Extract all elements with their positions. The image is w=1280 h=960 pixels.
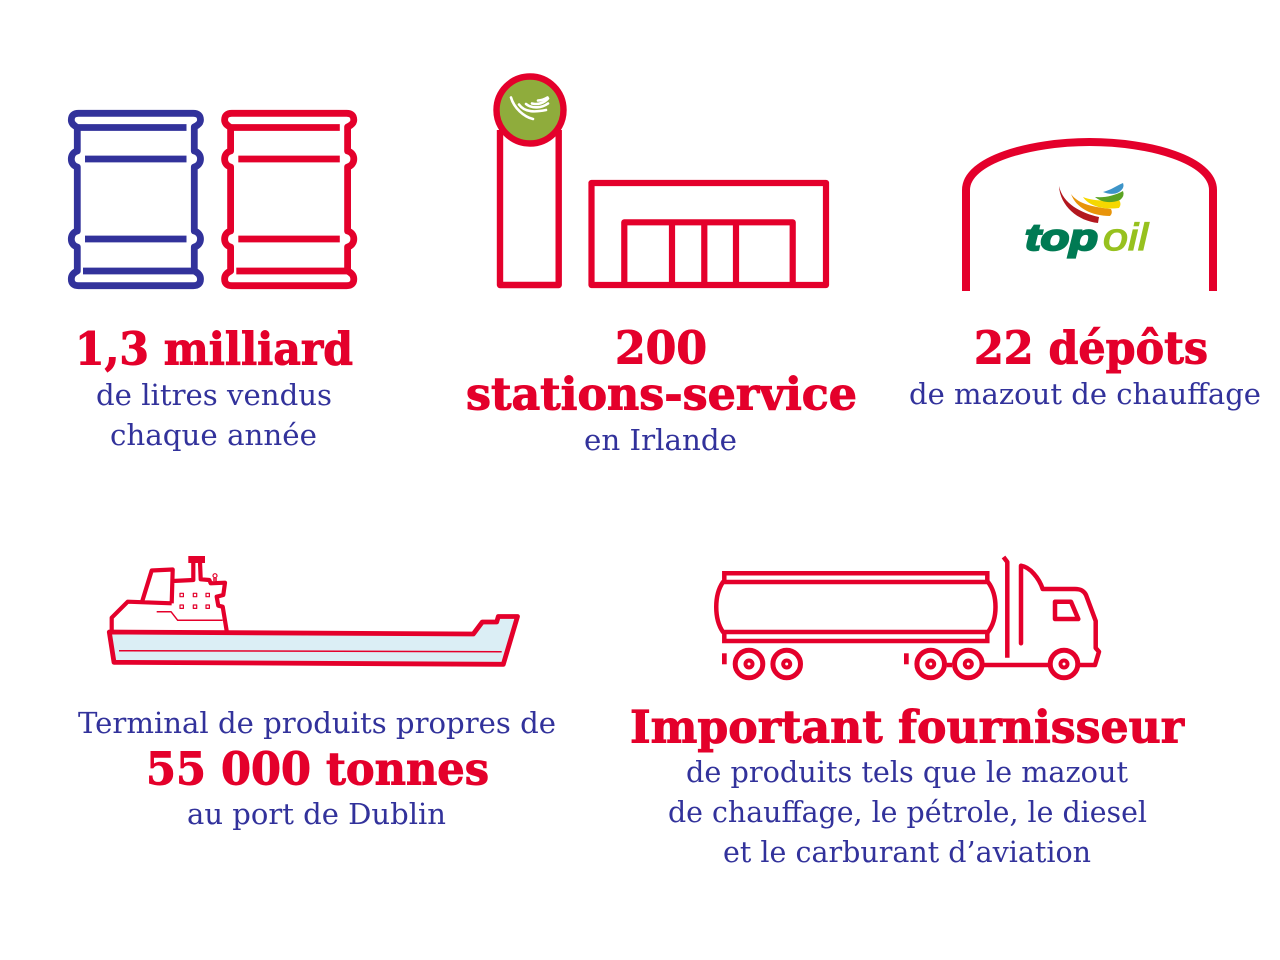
text: au port de Dublin: au port de Dublin (187, 797, 446, 831)
icon: tanker ship (109, 556, 519, 664)
text: de mazout de chauffage: de mazout de chauffage (909, 377, 1261, 411)
icon: station totem (496, 76, 564, 285)
text: de litres vendus chaque année: de litres vendus (96, 378, 332, 412)
icon: blue barrel (71, 113, 200, 286)
heading: important fournisseur: Important fournisseur (630, 700, 1185, 754)
heading: 200 stations-service (466, 322, 857, 420)
panel: service stations stat (466, 76, 857, 457)
heading: 1,3 milliard: 1,3 milliard (75, 322, 353, 376)
text: terminal de produits propres de: Terminal de produits propres de (78, 706, 556, 740)
panel: barrels stat (71, 113, 354, 452)
text: de litres vendus chaque année (96, 378, 332, 452)
logo: top oil: oil (1103, 217, 1150, 259)
logo: top oil: top (1025, 217, 1098, 258)
text: en Irlande: en Irlande (584, 423, 737, 457)
heading: 22 dépôts: 22 dépôts (974, 322, 1208, 374)
text: list of products: de chauffage, le pétrole, le diesel (668, 795, 1147, 829)
logo: top oil (1025, 183, 1150, 259)
panel: supplier stat (630, 557, 1185, 869)
icon: tanker truck (716, 557, 1099, 678)
heading: 55 000 tonnes: 55 000 tonnes (146, 742, 489, 796)
panel: terminal stat (78, 556, 556, 831)
text: list of products (668, 755, 1147, 869)
heading: 200 stations-service: 200 (615, 322, 707, 374)
heading: 200 stations-service: stations-service (466, 368, 857, 420)
icon: station shop (592, 183, 826, 285)
icon: red barrel (225, 113, 354, 286)
text: list of products: de produits tels que le mazout (686, 755, 1128, 789)
icon: storage tank (966, 142, 1213, 291)
text: list of products: et le carburant d’aviation (723, 835, 1091, 869)
panel: depots stat (909, 142, 1261, 411)
text: de litres vendus chaque année: chaque année (110, 418, 317, 452)
